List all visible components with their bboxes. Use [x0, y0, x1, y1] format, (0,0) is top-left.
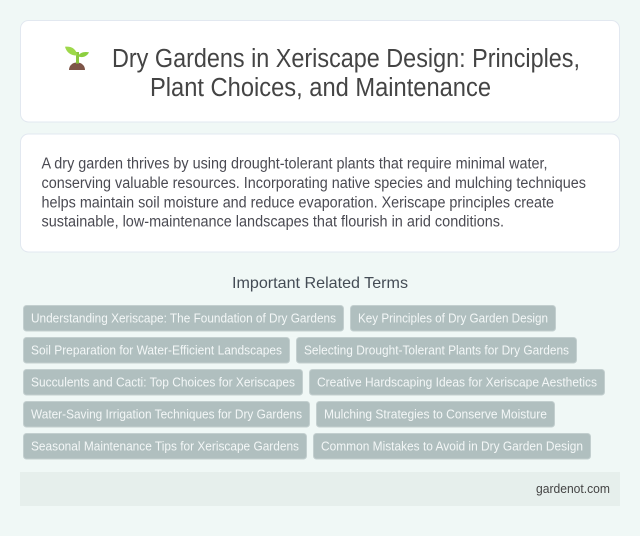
title: Plant Choices, and Maintenance	[150, 74, 491, 102]
tag: selecting plants	[296, 338, 576, 363]
tag: seasonal maintenance	[24, 434, 306, 459]
tag: creative hardscaping: Creative Hardscaping Ideas for Xeriscape Aesthetics	[317, 374, 597, 390]
panel: related term tags	[24, 306, 604, 459]
intro paragraph: conserving valuable resources. Incorporating native species and mulching techniques	[42, 175, 586, 192]
intro paragraph: A dry garden thrives by using drought-tolerant plants that require minimal water,	[42, 156, 548, 172]
intro paragraph: sustainable, low-maintenance landscapes that flourish in arid conditions.	[42, 214, 504, 230]
intro paragraph: helps maintain soil moisture and reduce evaporation. Xeriscape principles create	[42, 194, 554, 212]
footer bar: gardenot.com	[536, 481, 610, 496]
tag: mulching strategies: Mulching Strategies to Conserve Moisture	[324, 406, 547, 422]
tag: soil preparation: Soil Preparation for Water-Efficient Landscapes	[31, 342, 282, 358]
tag: key principles: Key Principles of Dry Garden Design	[358, 310, 548, 326]
tag: common mistakes	[314, 434, 590, 459]
tag: irrigation techniques	[24, 402, 310, 427]
panel: title card	[20, 20, 620, 122]
tag: common mistakes: Common Mistakes to Avoid in Dry Garden Design	[321, 438, 583, 454]
tag: selecting plants: Selecting Drought-Tolerant Plants for Dry Gardens	[304, 342, 569, 358]
heading: related terms: Important Related Terms	[232, 275, 408, 292]
panel: intro text card	[20, 134, 620, 252]
tag: key principles	[350, 306, 556, 331]
tag: mulching strategies	[316, 402, 554, 427]
tag: understanding xeriscape: Understanding Xeriscape: The Foundation of Dry Gardens	[31, 310, 336, 326]
tag: succulents and cacti: Succulents and Cacti: Top Choices for Xeriscapes	[31, 374, 295, 390]
title	[112, 45, 580, 102]
footer bar	[20, 472, 620, 506]
tag: seasonal maintenance: Seasonal Maintenance Tips for Xeriscape Gardens	[31, 438, 299, 454]
tag: creative hardscaping	[310, 370, 604, 395]
tag: succulents and cacti	[24, 370, 302, 395]
intro paragraph	[42, 156, 586, 230]
tag: irrigation techniques: Water-Saving Irrigation Techniques for Dry Gardens	[31, 406, 302, 422]
title: Dry Gardens in Xeriscape Design: Principles,	[112, 45, 580, 73]
tag: understanding xeriscape	[24, 306, 344, 331]
icon: seedling	[65, 47, 89, 70]
tag: soil preparation	[24, 338, 290, 363]
